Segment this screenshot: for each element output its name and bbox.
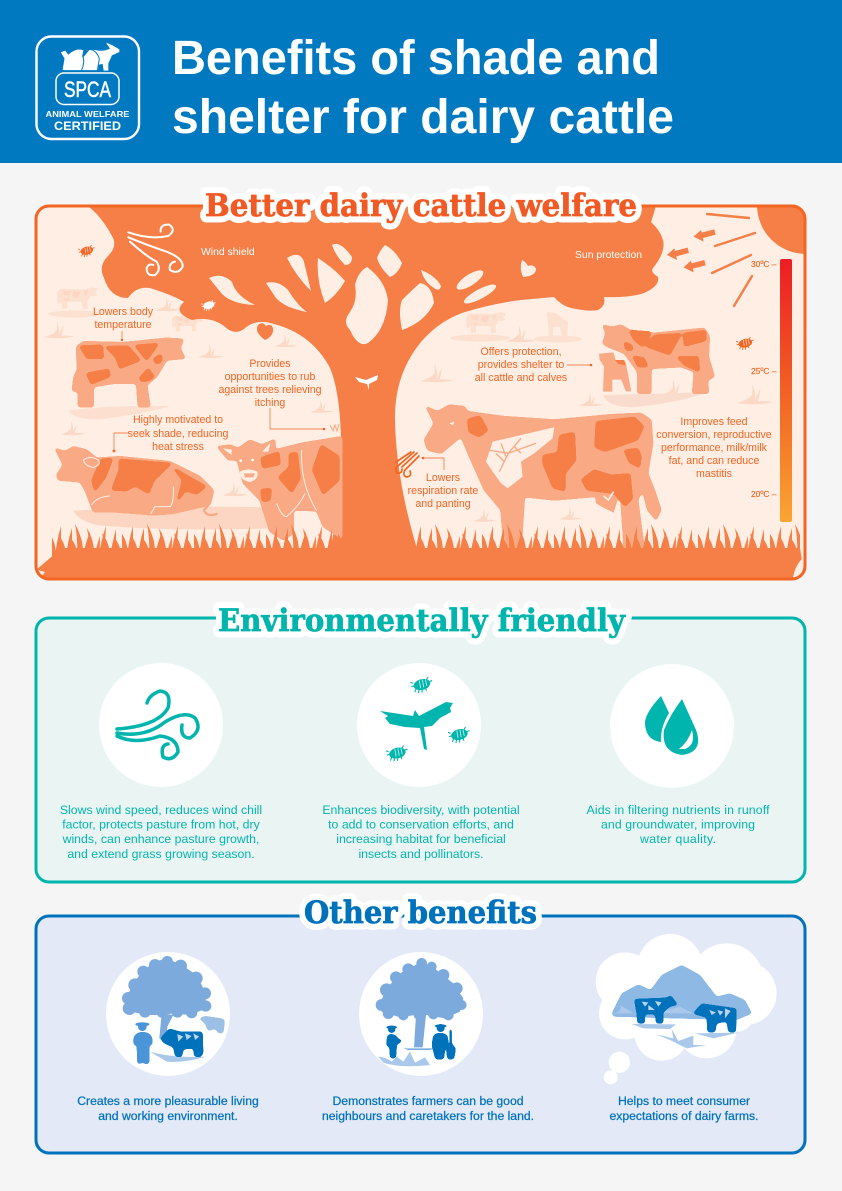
callout: feed conversion [656,416,772,480]
text: biodiversity: Enhances biodiversity, with potential [322,803,520,817]
heading: better dairy cattle welfare: Better dairy cattle welfare [205,188,637,224]
text: consumer [609,1094,759,1123]
text: water: and groundwater, improving [601,818,755,832]
sun arrows [667,229,716,272]
background grass tufts [44,297,773,522]
text: biodiversity: increasing habitat for beneficial [336,832,506,846]
callout: respiration: and panting [415,498,471,510]
text: pleasurable [77,1094,259,1123]
text: biodiversity: to add to conservation efforts, and [328,818,514,832]
canopy holes, oval [456,270,496,304]
sun rays [707,214,755,306]
text: wind: winds, can enhance pasture growth, [62,832,259,846]
callout: wind shield: Wind shield [201,247,255,258]
temperature labels: 25ºC – [751,366,777,376]
text: biodiversity: insects and pollinators. [358,847,484,861]
title: Benefits of shade and [172,32,660,85]
heading: environmentally friendly: Environmentally friendly [218,603,626,639]
text: water: water quality. [639,832,716,846]
text: neighbours [322,1094,534,1123]
SPCA certified logo: CERTIFIED [54,121,121,133]
callout: feed conversion: performance, milk/milk [661,442,768,454]
faded background cattle [48,287,582,342]
heart leaves [257,260,536,340]
callout: lowers body temperature: temperature [94,319,152,331]
callout: respiration: Lowers [426,472,460,484]
text: wind: and extend grass growing season. [67,847,255,861]
text: neighbours: Demonstrates farmers can be good [332,1094,524,1108]
text: wind: factor, protects pasture from hot, dry [62,818,261,832]
callout: feed conversion: Improves feed [680,416,748,428]
text: wind [60,803,262,861]
temperature labels: 30ºC – [751,259,777,269]
callout: lowers body temperature [93,306,154,341]
SPCA certified logo [36,36,139,139]
temperature gradient bar [780,259,792,522]
panel: environmentally friendly [36,603,805,882]
cow: mother with calf [599,325,714,407]
heading: environmentally friendly: Environmentally friendly [218,603,626,639]
SPCA certified logo: SPCA [64,77,111,102]
cow: lying down [55,447,270,529]
panel: better dairy cattle welfare [34,186,806,580]
heading: other benefits: Other benefits [304,895,537,931]
callout: respiration: respiration rate [408,485,478,497]
icon: water drops [610,664,734,788]
callout: feed conversion: fat, and can reduce [669,455,759,467]
sun [757,208,804,254]
icon: breath swirl [396,452,419,477]
text: pleasurable: Creates a more pleasurable living [77,1094,259,1108]
callout: sun protection: Sun protection [575,250,642,261]
text: consumer: expectations of dairy farms. [609,1109,759,1123]
callout: shelter: provides shelter to [478,359,564,371]
icon: thought cloud with cows [596,934,777,1084]
white dragonfly on trunk [355,375,378,390]
text: consumer: Helps to meet consumer [618,1094,750,1108]
farmer right with spade [432,1024,456,1059]
callout: heat stress: Highly motivated to [133,414,223,426]
title: shelter for dairy cattle [172,91,674,144]
text: wind: Slows wind speed, reduces wind chill [60,803,262,817]
callout: heat stress [113,414,228,453]
ground grass [38,524,804,578]
cow: left standing [68,338,185,419]
title [172,32,674,144]
callout: feed conversion: mastitis [696,468,732,480]
text: water [586,803,770,846]
callout: lowers body temperature: Lowers body [93,306,154,318]
panel: other benefits [36,895,805,1153]
callout: rub against trees [218,358,339,431]
temperature labels [751,259,777,499]
callout: feed conversion: conversion, reproductive [656,429,772,441]
cow: front facing by trunk [217,437,342,540]
callout: rub against trees: Provides [249,358,291,370]
text: neighbours: neighbours and caretakers for the land. [322,1109,534,1123]
callout: rub against trees: opportunities to rub [225,371,315,383]
SPCA certified logo: ANIMAL WELFARE [46,110,130,119]
callout: heat stress: seek shade, reducing [128,428,228,440]
callout: shelter: all cattle and calves [475,372,567,384]
farmer left [386,1026,402,1058]
icon: dragonfly and bees [357,663,481,787]
icon: farmer with cow under tree [106,952,230,1076]
heading: other benefits: Other benefits [304,895,537,931]
farmer [133,1022,153,1064]
panel border [36,206,805,579]
cow: large with lungs [424,405,661,550]
header band [0,0,842,163]
callout: respiration [396,452,478,510]
icon: farmers under tree [359,952,483,1076]
temperature labels: 20ºC – [751,489,777,499]
wind icon white [128,225,183,275]
callout: heat stress: heat stress [152,441,204,453]
callout: shelter: Offers protection, [480,346,562,358]
icon: wind [99,663,223,787]
tree canopy and trunk [86,205,664,552]
callout: rub against trees: against trees relieving [218,384,322,396]
text: biodiversity [322,803,520,861]
callout: shelter [475,346,592,384]
text: pleasurable: and working environment. [98,1109,238,1123]
bees [78,245,754,350]
heading: better dairy cattle welfare: Better dairy cattle welfare [205,188,637,224]
callout: rub against trees: itching [255,397,285,409]
text: water: Aids in filtering nutrients in runoff [586,803,770,817]
